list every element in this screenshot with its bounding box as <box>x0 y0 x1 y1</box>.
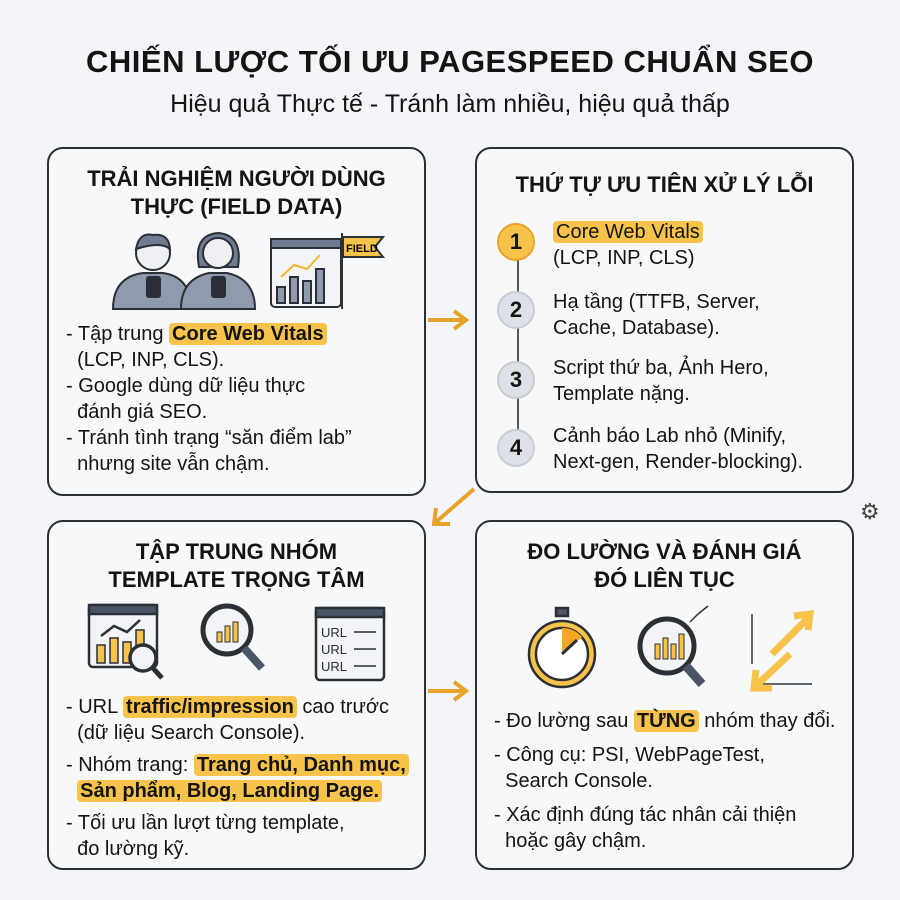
arrow: top horizontal <box>428 309 470 331</box>
step 2: Cache, Database). <box>553 317 720 339</box>
heading: field data: THỰC (FIELD DATA) <box>131 194 342 219</box>
arrow: diagonal <box>432 488 476 526</box>
timeline line <box>517 241 519 451</box>
step 4: Next-gen, Render-blocking). <box>553 451 803 473</box>
panel: template groups <box>47 520 426 870</box>
heading: templates <box>108 539 365 592</box>
step 2 <box>497 291 760 339</box>
step 4: 4 <box>510 435 522 460</box>
text: bullets: - Nhóm trang: Trang chủ, Danh mục, <box>66 754 406 776</box>
step 2: 2 <box>510 297 522 322</box>
step 2: Hạ tầng (TTFB, Server, <box>553 291 760 313</box>
text: bullets: đo lường kỹ. <box>77 838 189 860</box>
text: bullets <box>66 323 352 475</box>
heading: measure: ĐÓ LIÊN TỤC <box>594 567 735 592</box>
text: bullets: - Tập trung Core Web Vitals <box>66 323 324 345</box>
heading: templates: TEMPLATE TRỌNG TÂM <box>108 567 365 592</box>
text: bullets: hoặc gây chậm. <box>505 830 646 852</box>
text: bullets: - Tránh tình trạng “săn điểm lab” <box>66 427 352 449</box>
panel: field data <box>47 147 426 496</box>
text: bullets: - Đo lường sau TỪNG nhóm thay đổi. <box>494 710 835 732</box>
text: bullets: - Xác định đúng tác nhân cải thiện <box>494 804 796 826</box>
text: bullets <box>494 708 835 852</box>
heading: measure: ĐO LƯỜNG VÀ ĐÁNH GIÁ <box>527 539 802 564</box>
text: bullets: Sản phẩm, Blog, Landing Page. <box>80 780 379 802</box>
heading: templates: TẬP TRUNG NHÓM <box>136 539 337 564</box>
text: bullets: (LCP, INP, CLS). <box>77 349 224 371</box>
icon: users with phones <box>112 232 385 310</box>
icons: templates: URL <box>321 642 347 657</box>
text: bullets <box>66 696 409 860</box>
icon: users with phones: FIELD <box>346 243 378 255</box>
text: bullets: - Tối ưu lần lượt từng template, <box>66 812 345 834</box>
heading: field data <box>87 166 386 219</box>
title: CHIẾN LƯỢC TỐI ƯU PAGESPEED CHUẨN SEO <box>86 44 814 79</box>
step 3: Script thứ ba, Ảnh Hero, <box>553 357 769 379</box>
step 1 <box>497 221 703 269</box>
step 4 <box>497 425 803 473</box>
text: bullets: - Công cụ: PSI, WebPageTest, <box>494 744 765 766</box>
text: bullets: - Google dùng dữ liệu thực <box>66 375 305 397</box>
text: bullets: - URL traffic/impression cao trước <box>66 696 389 718</box>
text: bullets: Search Console. <box>505 770 653 792</box>
step 1: Core Web Vitals <box>556 221 700 243</box>
step 3: Template nặng. <box>553 383 690 405</box>
text: bullets: (dữ liệu Search Console). <box>77 722 305 744</box>
step 1: 1 <box>510 229 522 254</box>
arrow: bottom horizontal <box>428 680 470 702</box>
subtitle: Hiệu quả Thực tế - Tránh làm nhiều, hiệu quả thấp <box>170 90 730 118</box>
step 3 <box>497 356 769 405</box>
heading: field data: TRẢI NGHIỆM NGƯỜI DÙNG <box>87 166 386 191</box>
icons: templates: URL <box>321 659 347 674</box>
heading: measure <box>527 539 802 592</box>
heading: priority: THỨ TỰ ƯU TIÊN XỬ LÝ LỖI <box>516 172 813 197</box>
icon: gear: ⚙ <box>860 499 880 524</box>
icons: templates: URL <box>321 625 347 640</box>
panel: measure <box>475 520 854 870</box>
icons: stopwatch, magnifier, arrows <box>528 605 814 692</box>
text: bullets: nhưng site vẫn chậm. <box>77 453 270 475</box>
panel: priority <box>475 147 854 493</box>
icons: templates <box>88 604 386 682</box>
step 1: (LCP, INP, CLS) <box>553 247 695 269</box>
step 3: 3 <box>510 367 522 392</box>
step 4: Cảnh báo Lab nhỏ (Minify, <box>553 425 786 447</box>
text: bullets: đánh giá SEO. <box>77 401 207 423</box>
